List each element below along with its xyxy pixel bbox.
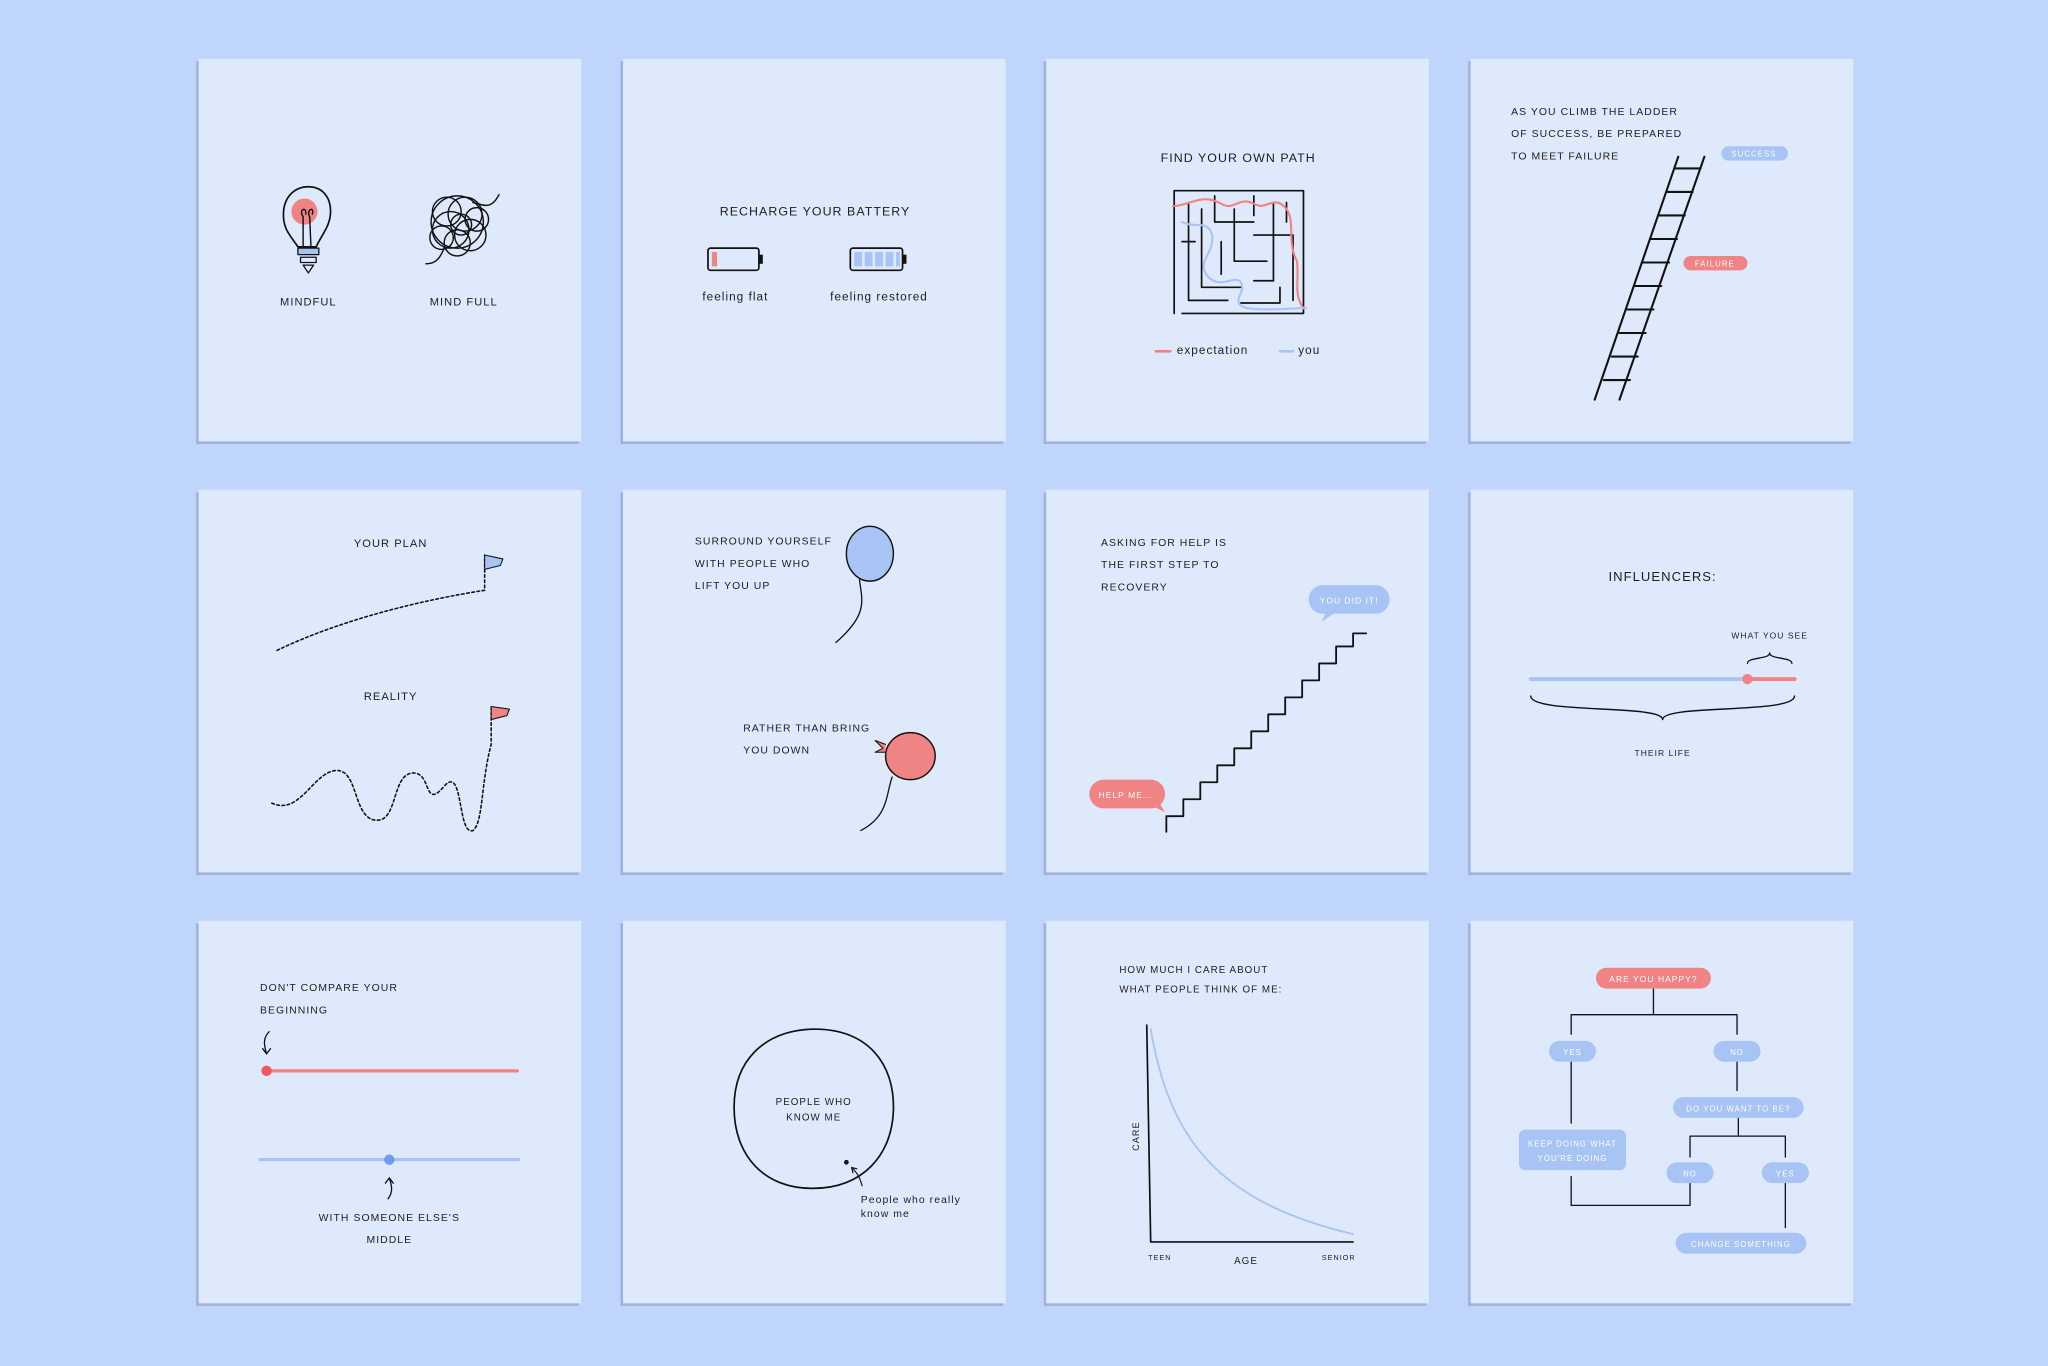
title: HOW MUCH I CARE ABOUT: [1119, 965, 1268, 976]
title: FIND YOUR OWN PATH: [1161, 151, 1316, 165]
title: RECHARGE YOUR BATTERY: [720, 204, 910, 218]
text block: rather than: YOU DOWN: [743, 746, 810, 757]
label: really know me: know me: [861, 1209, 910, 1220]
pill: yes 2: [1762, 1162, 1809, 1183]
heading: your plan: YOUR PLAN: [354, 538, 427, 550]
legend: [1156, 344, 1320, 357]
label: what you see: WHAT YOU SEE: [1731, 631, 1808, 641]
panel: flowchart: [1468, 921, 1853, 1306]
text block: [1511, 107, 1682, 162]
panel: recharge battery: [620, 59, 1006, 444]
pill: change something: [1676, 1233, 1806, 1254]
label: mindful: MINDFUL: [280, 297, 337, 309]
label: [776, 1097, 852, 1123]
pill: no: NO: [1730, 1048, 1744, 1057]
red line: [261, 1066, 517, 1076]
heading: reality: REALITY: [364, 691, 417, 703]
chart: TEEN: [1148, 1254, 1171, 1262]
speech bubble: you did it: [1309, 585, 1390, 622]
text block: ASKING FOR HELP IS: [1101, 538, 1227, 549]
arrow down: [263, 1032, 270, 1054]
maze: [1173, 191, 1306, 313]
pill: failure: FAILURE: [1695, 259, 1735, 268]
text block: middle: WITH SOMEONE ELSE'S: [319, 1213, 460, 1224]
pill: yes: [1549, 1041, 1596, 1062]
text block: surround: WITH PEOPLE WHO: [695, 559, 810, 570]
arrow up: [385, 1178, 393, 1199]
pill: yes 2: YES: [1776, 1170, 1795, 1179]
panel: find your own path: [1044, 59, 1429, 444]
text block: surround: LIFT YOU UP: [695, 581, 770, 592]
panel: ladder of success: [1468, 59, 1853, 444]
text block: middle: MIDDLE: [366, 1235, 412, 1246]
icon: tangle: [426, 195, 499, 264]
speech bubble: you did it: YOU DID IT!: [1320, 595, 1379, 605]
panel: mindful: [196, 59, 581, 444]
pill: no 2: NO: [1683, 1170, 1697, 1179]
label: their life: THEIR LIFE: [1635, 748, 1691, 758]
panel: people who know me: [620, 921, 1006, 1306]
pill: success: SUCCESS: [1731, 150, 1777, 159]
pill: do you want to be: [1673, 1097, 1804, 1118]
text block: surround: SURROUND YOURSELF: [695, 537, 832, 548]
dotted plan line: [277, 555, 503, 650]
panel: plan vs reality: [196, 490, 581, 875]
timeline bar: [1531, 674, 1794, 684]
chart: [1131, 1025, 1356, 1267]
pill: no: [1714, 1041, 1761, 1062]
label: feeling flat: feeling flat: [702, 290, 768, 303]
stairs: [1166, 633, 1366, 832]
icon: ladder: [1595, 157, 1704, 400]
label: mind full: MIND FULL: [430, 297, 498, 309]
text block: beginning: [260, 983, 398, 1016]
text block: middle: [319, 1213, 460, 1246]
icon: red balloon: [861, 733, 935, 831]
label: PEOPLE WHO: [776, 1097, 852, 1108]
icon: flat battery: [708, 248, 763, 270]
dotted reality line: [272, 707, 509, 831]
pill: no 2: [1667, 1162, 1714, 1183]
panel: how much I care: [1044, 921, 1429, 1306]
panel: don't compare: [196, 921, 581, 1306]
text block: surround: [695, 537, 832, 592]
legend: expectation: [1177, 344, 1248, 357]
text block: [1101, 538, 1227, 593]
text block: beginning: DON'T COMPARE YOUR: [260, 983, 398, 994]
big brace: [1531, 696, 1794, 720]
panel: balloons: [620, 490, 1006, 875]
small brace: [1747, 653, 1792, 663]
text block: rather than: RATHER THAN BRING: [743, 723, 870, 734]
label: KNOW ME: [786, 1112, 841, 1123]
pill: success: [1721, 146, 1788, 161]
pill: change something: CHANGE SOMETHING: [1691, 1240, 1791, 1249]
connectors: [1571, 989, 1785, 1228]
text block: OF SUCCESS, BE PREPARED: [1511, 129, 1682, 140]
pill: failure: [1683, 256, 1747, 270]
title: WHAT PEOPLE THINK OF ME:: [1119, 985, 1282, 996]
text block: rather than: [743, 723, 870, 757]
icon: full battery: [850, 248, 906, 270]
legend: you: [1298, 344, 1320, 357]
box: keep doing: YOU'RE DOING: [1538, 1154, 1607, 1163]
panel: influencers: [1468, 490, 1853, 875]
circle: [734, 1029, 893, 1188]
blue line: [260, 1154, 519, 1165]
text block: TO MEET FAILURE: [1511, 151, 1619, 162]
icon: light bulb: [283, 187, 331, 273]
chart: AGE: [1234, 1256, 1258, 1267]
speech bubble: help me: [1089, 780, 1165, 812]
text block: beginning: BEGINNING: [260, 1005, 328, 1016]
label: really know me: [861, 1195, 961, 1220]
pill: are you happy: [1596, 968, 1711, 989]
chart: CARE: [1131, 1121, 1141, 1151]
chart: SENIOR: [1322, 1254, 1356, 1262]
text block: THE FIRST STEP TO: [1101, 560, 1220, 571]
pill: are you happy: ARE YOU HAPPY?: [1609, 974, 1698, 984]
label: feeling restored: feeling restored: [830, 290, 928, 303]
box: keep doing: KEEP DOING WHAT: [1528, 1140, 1617, 1149]
icon: blue balloon: [836, 526, 893, 643]
text block: AS YOU CLIMB THE LADDER: [1511, 107, 1678, 118]
speech bubble: help me: HELP ME...: [1099, 790, 1153, 800]
dot and arrow: [844, 1160, 862, 1186]
panel: asking for help: [1044, 490, 1429, 875]
box: keep doing: [1519, 1130, 1626, 1170]
pill: yes: YES: [1563, 1048, 1582, 1057]
text block: RECOVERY: [1101, 582, 1168, 593]
title: INFLUENCERS:: [1608, 569, 1717, 584]
label: really know me: People who really: [861, 1195, 961, 1206]
title: [1119, 965, 1282, 996]
pill: do you want to be: DO YOU WANT TO BE?: [1686, 1104, 1790, 1113]
